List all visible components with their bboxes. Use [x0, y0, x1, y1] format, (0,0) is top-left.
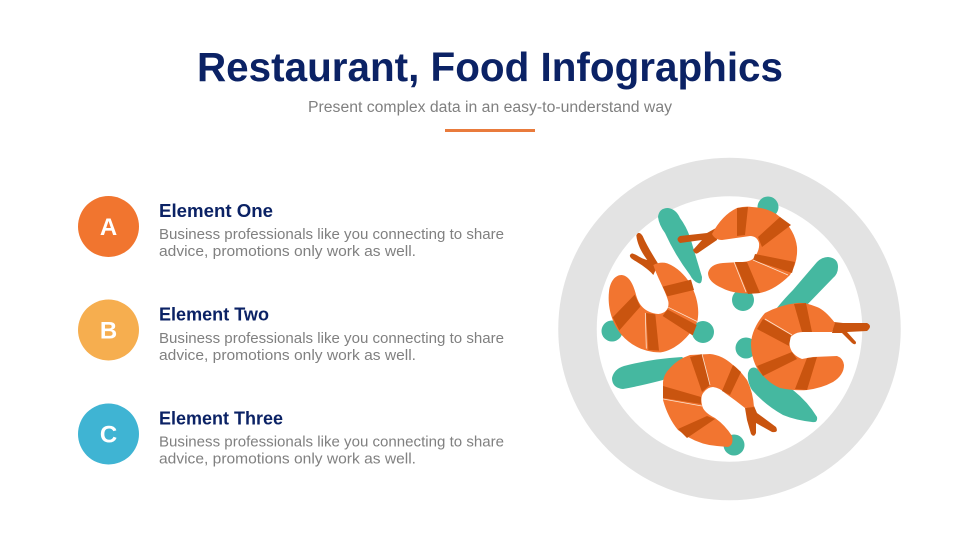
- element two body: advice, promotions only work as well.: [159, 347, 416, 364]
- badge A: A: [100, 214, 117, 241]
- shrimp top: [678, 207, 797, 294]
- element two heading: Element Two: [159, 304, 269, 324]
- badge C: [78, 404, 139, 464]
- element one body: advice, promotions only work as well.: [159, 243, 416, 260]
- badge C: C: [100, 422, 117, 448]
- element one heading: Element One: [159, 201, 273, 221]
- plate: [578, 177, 882, 481]
- title: Restaurant, Food Infographics: [197, 44, 783, 90]
- badge B: B: [100, 318, 117, 344]
- plate illustration: [578, 177, 882, 481]
- element three body: advice, promotions only work as well.: [159, 450, 416, 468]
- badge A: [78, 196, 139, 257]
- element three body: Business professionals like you connecting to share: [159, 434, 504, 450]
- element one body: Business professionals like you connecting to share: [159, 226, 504, 243]
- element three heading: Element Three: [159, 408, 283, 428]
- garnish leaves: [602, 196, 838, 456]
- subtitle: Present complex data in an easy-to-understand way: [308, 99, 672, 116]
- shrimp bottom: [663, 354, 777, 447]
- badge B: [78, 300, 139, 360]
- element two body: Business professionals like you connecting to share: [159, 330, 504, 347]
- shrimp right: [751, 303, 870, 390]
- element three body: [159, 434, 504, 468]
- element three: [78, 404, 504, 468]
- shrimp left: [609, 233, 698, 352]
- element two body: [159, 330, 504, 364]
- element one: [78, 196, 504, 260]
- element two: [78, 300, 504, 364]
- element one body: [159, 226, 504, 260]
- title underline: [445, 129, 535, 132]
